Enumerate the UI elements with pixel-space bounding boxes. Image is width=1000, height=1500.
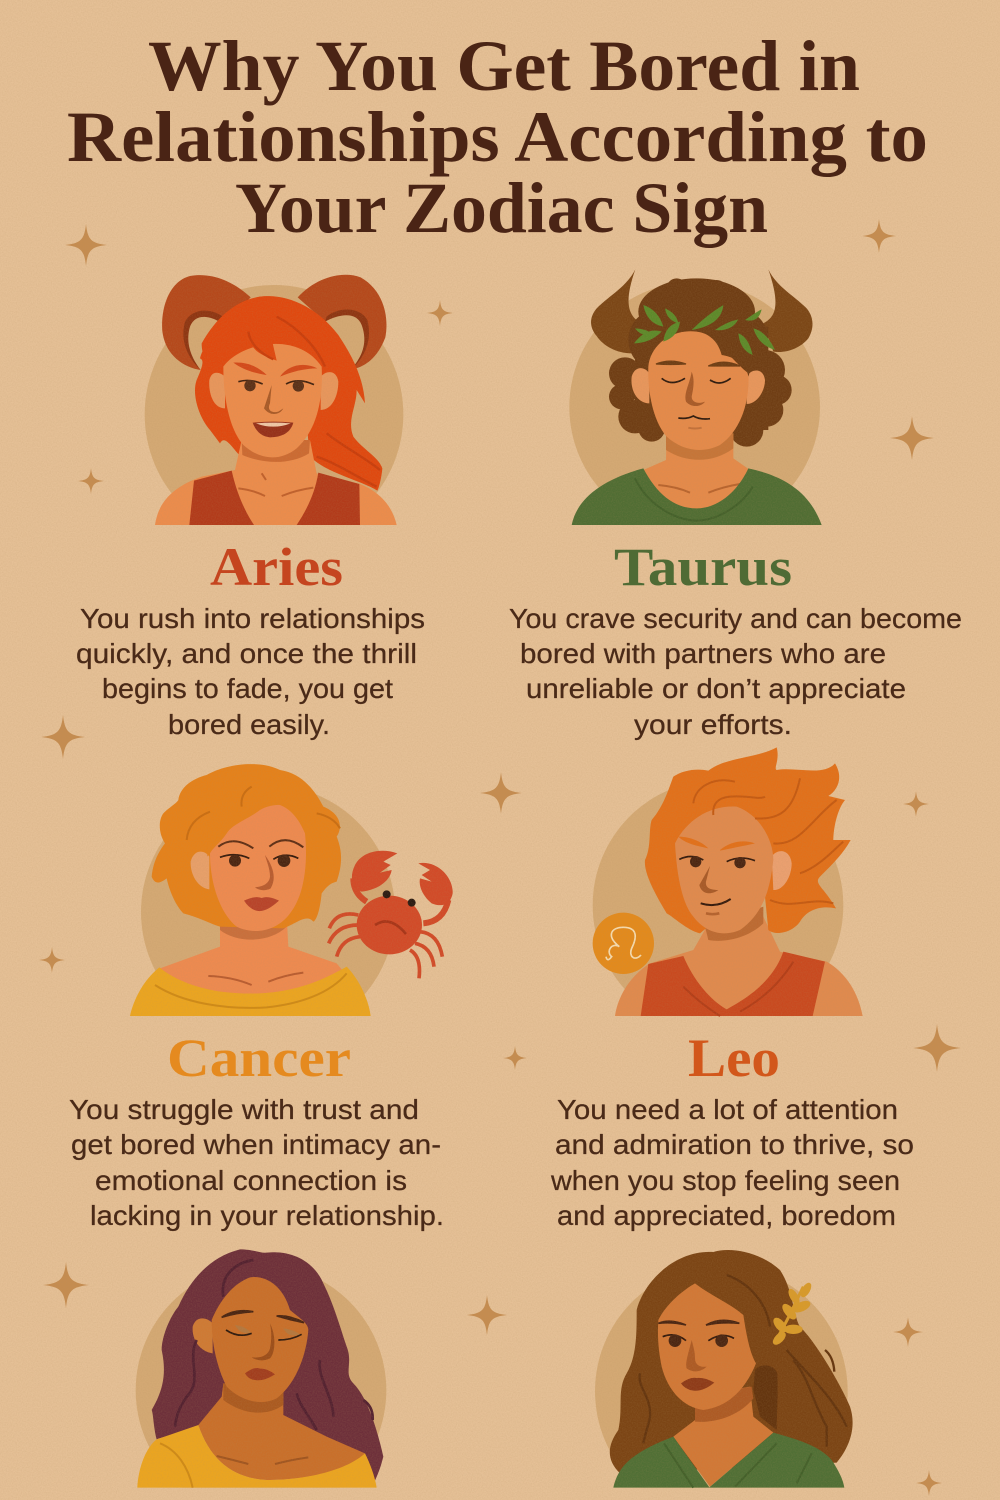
- green top: [613, 1433, 844, 1488]
- decorative sparkle stars: [39, 219, 961, 1496]
- eyebrows: [218, 840, 303, 848]
- label: Cancer heading: Cancer: [167, 1028, 351, 1088]
- text block: Leo description: You need a lot of attention: [557, 1094, 898, 1125]
- green top: [572, 468, 822, 525]
- eyebrows: [656, 361, 740, 366]
- text block: Leo description: and admiration to thrive, so: [555, 1129, 914, 1160]
- text block: Taurus description: [509, 603, 962, 740]
- text block: Taurus description: You crave security and can become: [509, 603, 962, 634]
- ear: [191, 852, 209, 889]
- shoulders and neck: [155, 440, 397, 525]
- dark red tank top: [189, 471, 360, 525]
- long purple hair: [152, 1249, 383, 1481]
- text block: Leo description: when you stop feeling seen: [550, 1165, 900, 1196]
- portrait: Aries woman with ram horns: [145, 275, 403, 544]
- crab claws: [352, 851, 453, 905]
- ear: [193, 1318, 213, 1353]
- lips: [245, 1368, 275, 1380]
- face: [223, 344, 322, 457]
- face: [210, 803, 306, 931]
- eyes: [220, 855, 298, 859]
- lips: [244, 897, 279, 911]
- title: Why You Get Bored in: [148, 26, 860, 106]
- text block: Aries description: begins to fade, you get: [102, 673, 393, 704]
- fringe: [202, 296, 327, 373]
- nose: [264, 385, 283, 414]
- nose: [685, 372, 705, 406]
- lips: [681, 1378, 714, 1391]
- icon: bull horns: [591, 269, 812, 353]
- ear: [772, 851, 792, 890]
- text block: Cancer description: get bored when intimacy an-: [71, 1129, 441, 1160]
- text block: Taurus description: bored with partners who are: [520, 638, 886, 669]
- text block: Leo description: [550, 1094, 914, 1231]
- face: [675, 807, 773, 933]
- eyebrows: [678, 837, 755, 851]
- neck and chest: [198, 1383, 365, 1480]
- label: Aries heading: Aries: [210, 537, 343, 597]
- eyebrows: [222, 1311, 304, 1323]
- shoulders and neck: [615, 917, 863, 1016]
- nose: [699, 866, 718, 893]
- flowing orange hair: [645, 747, 851, 933]
- hair strands: [248, 317, 380, 487]
- icon: Leo zodiac medallion: [593, 913, 654, 974]
- text block: Aries description: bored easily.: [168, 709, 330, 740]
- crab claw arms: [353, 878, 448, 923]
- text block: Cancer description: lacking in your relationship.: [90, 1200, 444, 1231]
- title: Your Zodiac Sign: [235, 168, 768, 248]
- title: [67, 26, 928, 248]
- face: [658, 1283, 756, 1410]
- closed eyes: [226, 1330, 302, 1340]
- icon: ram horns: [162, 275, 386, 370]
- face: [648, 331, 749, 450]
- ears: [631, 368, 765, 404]
- nose: [686, 1340, 707, 1371]
- long brown hair: [610, 1250, 853, 1473]
- portrait: Cancer woman with crab: [130, 764, 453, 1039]
- smile: [253, 422, 293, 437]
- text block: Cancer description: emotional connection is: [95, 1165, 407, 1196]
- portrait: woman with long purple hair: [136, 1249, 386, 1500]
- eyes: [663, 1335, 734, 1341]
- hair strands: [640, 1275, 847, 1447]
- closed eyes: [662, 378, 731, 383]
- eyebrows: [658, 1320, 739, 1325]
- portrait: Taurus figure with bull horns and leaf wreath: [569, 269, 822, 532]
- mouth: [678, 416, 710, 419]
- smirk: [701, 899, 731, 905]
- shoulders and neck: [160, 917, 353, 1000]
- text block: Aries description: quickly, and once the thrill: [76, 638, 417, 669]
- title: Relationships According to: [67, 97, 928, 177]
- eyes: [238, 380, 314, 385]
- hair strands: [175, 1260, 373, 1430]
- long red hair: [195, 296, 382, 491]
- face: [212, 1277, 308, 1402]
- shoulders and neck: [643, 433, 750, 510]
- crab eyes: [383, 890, 391, 898]
- nose: [255, 855, 274, 890]
- text block: Taurus description: unreliable or don’t appreciate: [526, 673, 906, 704]
- curly brown hair: [609, 278, 792, 447]
- icon: crab: [329, 851, 453, 978]
- ears: [209, 372, 338, 410]
- curly orange hair: [152, 764, 341, 928]
- text block: Cancer description: [69, 1094, 444, 1231]
- icon: wheat sprig: [771, 1281, 813, 1347]
- portrait: Leo figure with flowing hair: [593, 747, 863, 1031]
- text block: Aries description: You rush into relationships: [80, 603, 425, 634]
- eyes: [679, 856, 755, 862]
- hair waves: [693, 778, 843, 904]
- nose: [252, 1323, 274, 1360]
- neck and chest: [673, 1387, 773, 1487]
- leaf wreath: [634, 305, 775, 355]
- orange top: [641, 952, 825, 1016]
- shadow lock behind jaw: [753, 1365, 778, 1430]
- eyebrows: [233, 363, 317, 377]
- text block: Taurus description: your efforts.: [634, 709, 792, 740]
- label: Leo heading: Leo: [688, 1028, 780, 1088]
- text block: Aries description: [76, 603, 425, 740]
- hair fringe: [680, 320, 760, 377]
- crab body: [357, 896, 422, 954]
- crab legs: [329, 914, 442, 978]
- label: Taurus heading: Taurus: [614, 537, 792, 597]
- yellow top: [130, 967, 371, 1016]
- portrait: woman with long brown hair and wheat sprig: [595, 1250, 853, 1500]
- text block: Cancer description: You struggle with trust and: [69, 1094, 419, 1125]
- text block: Leo description: and appreciated, boredom: [557, 1200, 896, 1231]
- yellow top: [137, 1425, 377, 1488]
- crab frown: [375, 922, 406, 934]
